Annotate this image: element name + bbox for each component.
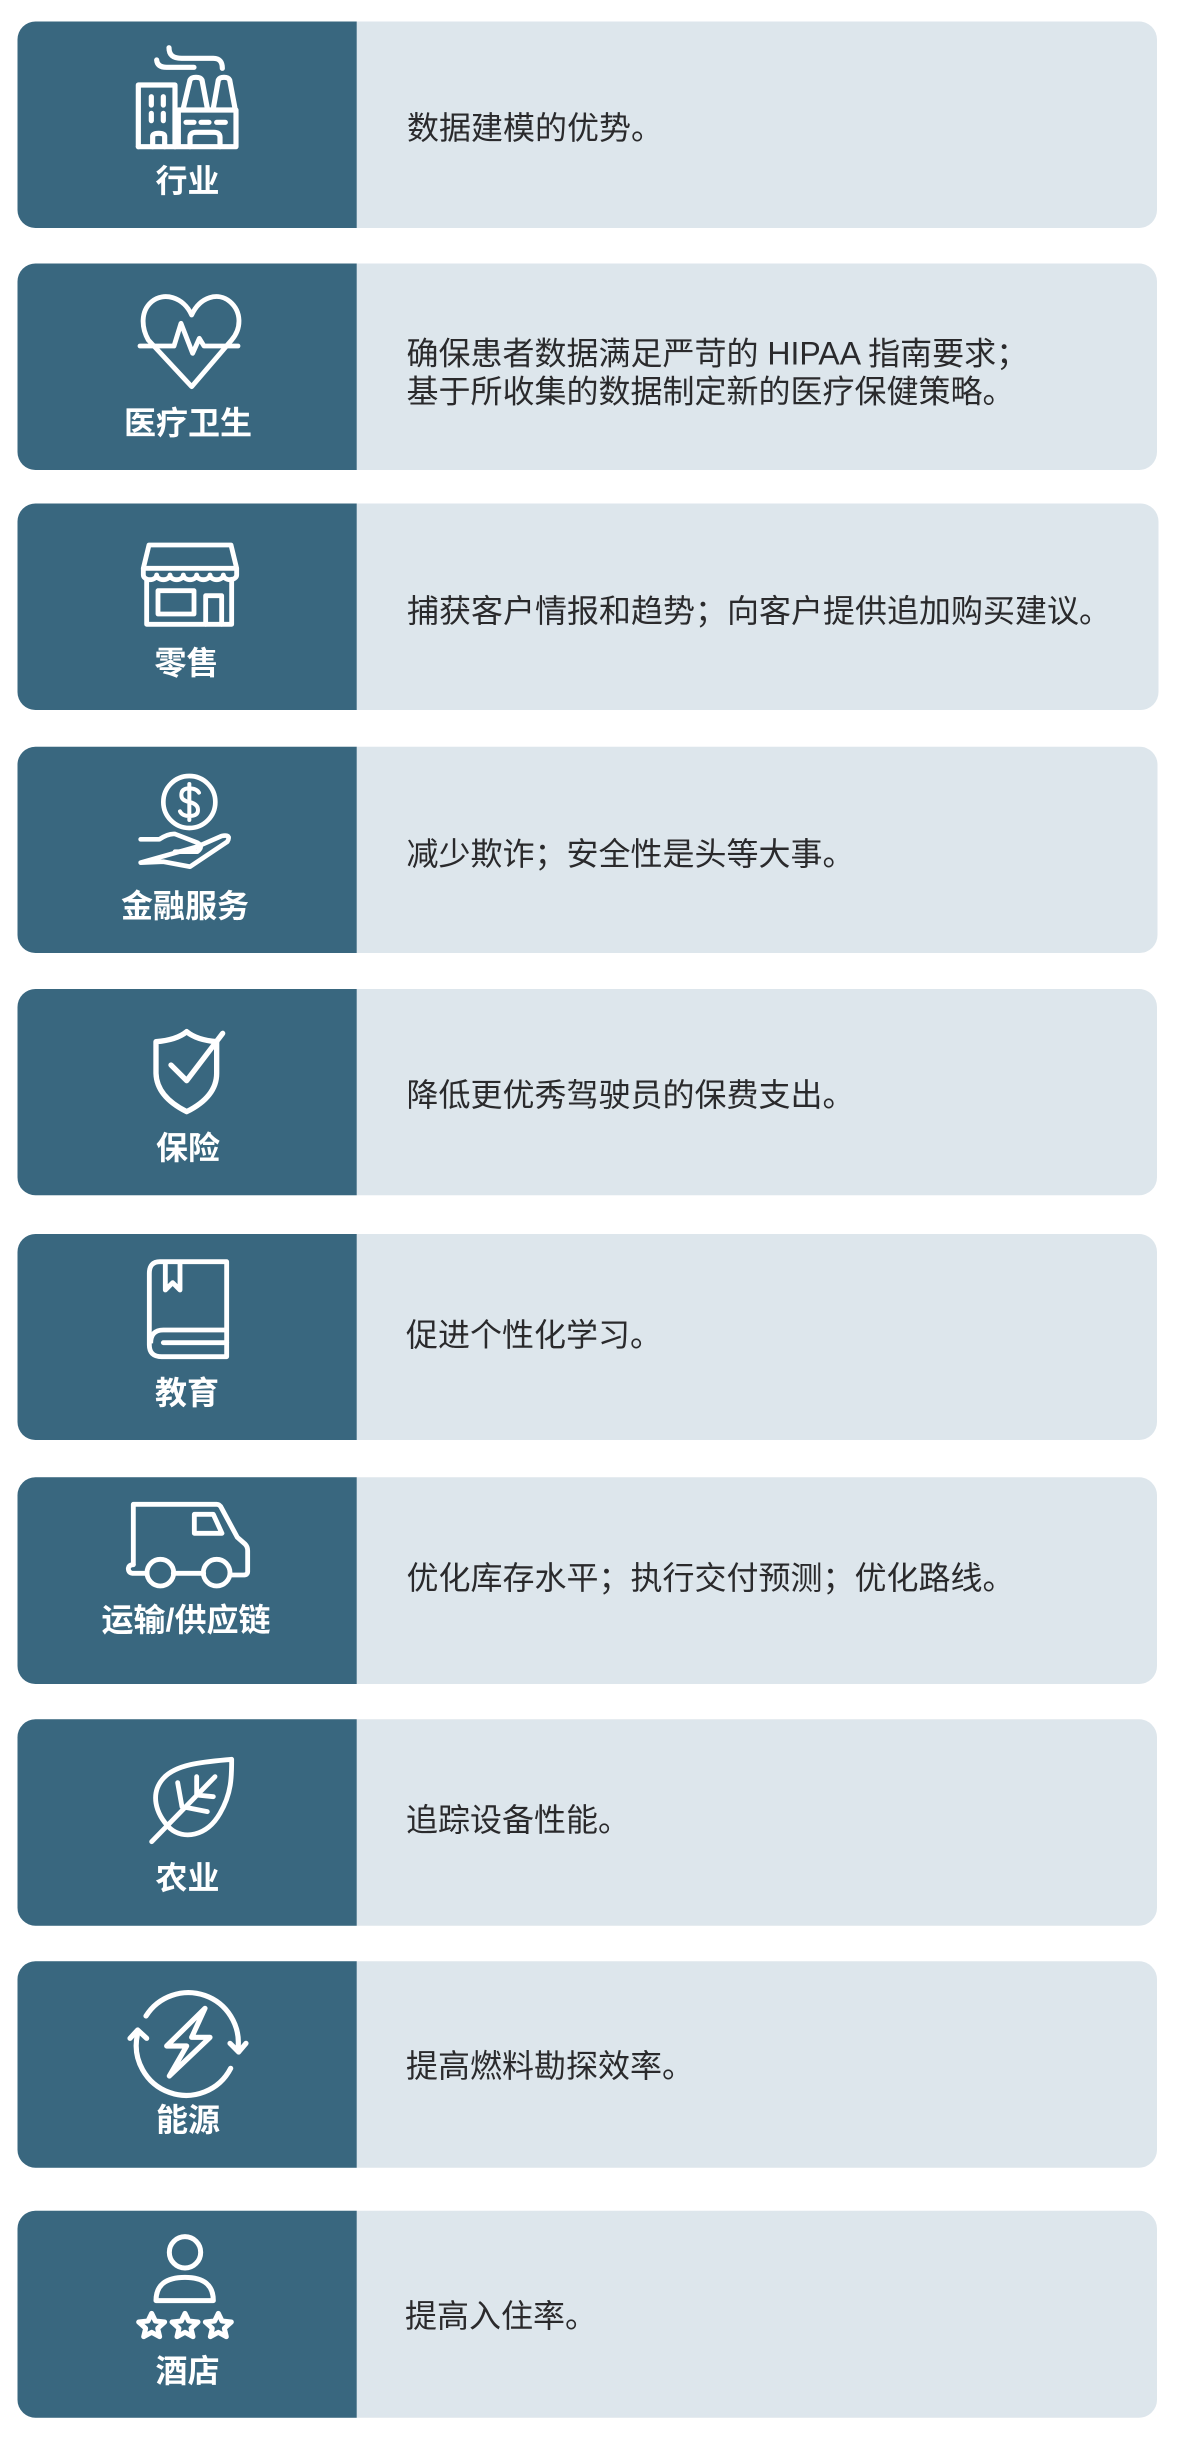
icon: hand holding coin bbox=[141, 776, 229, 867]
description: healthcare bbox=[406, 336, 1028, 410]
content background bbox=[18, 504, 1158, 710]
content background bbox=[18, 1961, 1157, 2168]
panel: transport and supply chain bbox=[18, 1477, 1157, 1684]
content background bbox=[18, 989, 1157, 1195]
label: insurance: 保险 bbox=[156, 1130, 220, 1166]
icon: energy bolt cycle bbox=[130, 1993, 246, 2095]
label background bbox=[18, 1961, 357, 2168]
panel: industry bbox=[18, 22, 1157, 228]
line 1: 确保患者数据满足严苛的 HIPAA 指南要求； bbox=[406, 336, 1028, 372]
panel: energy bbox=[18, 1961, 1157, 2168]
label: agriculture: 农业 bbox=[155, 1860, 220, 1896]
content background bbox=[18, 2211, 1157, 2418]
label background bbox=[18, 747, 357, 953]
icon: person with three stars bbox=[139, 2237, 231, 2337]
label: education: 教育 bbox=[155, 1375, 219, 1411]
label: hotels: 酒店 bbox=[155, 2353, 220, 2389]
description: insurance: 降低更优秀驾驶员的保费支出。 bbox=[406, 1077, 855, 1113]
panel: financial services bbox=[18, 747, 1158, 953]
content background bbox=[18, 1234, 1157, 1440]
icon: book bbox=[149, 1262, 227, 1357]
label background bbox=[18, 1477, 357, 1684]
label background bbox=[18, 1234, 357, 1440]
panel: healthcare bbox=[18, 264, 1157, 470]
label background bbox=[18, 504, 357, 710]
description: hotels: 提高入住率。 bbox=[405, 2298, 597, 2334]
label: financial services: 金融服务 bbox=[121, 888, 249, 924]
description: retail: 捕获客户情报和趋势；向客户提供追加购买建议。 bbox=[407, 593, 1111, 629]
content background bbox=[18, 264, 1157, 470]
icon: storefront bbox=[143, 545, 237, 624]
icon: leaf bbox=[152, 1759, 232, 1842]
content background bbox=[18, 747, 1158, 953]
panel: agriculture bbox=[18, 1719, 1157, 1926]
icon: heart with pulse bbox=[140, 297, 239, 387]
label background bbox=[18, 264, 357, 470]
description: financial services: 减少欺诈；安全性是头等大事。 bbox=[406, 836, 855, 872]
panel: education bbox=[18, 1234, 1157, 1440]
description: energy: 提高燃料勘探效率。 bbox=[406, 2048, 694, 2084]
label: retail: 零售 bbox=[154, 645, 219, 681]
content background bbox=[18, 22, 1157, 228]
label: energy: 能源 bbox=[156, 2102, 220, 2138]
line 2: 基于所收集的数据制定新的医疗保健策略。 bbox=[406, 374, 1015, 410]
description: agriculture: 追踪设备性能。 bbox=[406, 1802, 630, 1838]
content background bbox=[18, 1477, 1157, 1684]
description: industry: 数据建模的优势。 bbox=[407, 110, 663, 146]
description: transport and supply chain: 优化库存水平；执行交付预测；优化路线。 bbox=[406, 1560, 1015, 1596]
panel: hotels bbox=[18, 2211, 1157, 2418]
panel: insurance bbox=[18, 989, 1157, 1195]
content background bbox=[18, 1719, 1157, 1926]
label: healthcare: 医疗卫生 bbox=[124, 405, 252, 441]
description: education: 促进个性化学习。 bbox=[406, 1317, 662, 1353]
icon: shield with check bbox=[156, 1032, 223, 1112]
label background bbox=[18, 22, 357, 228]
label background bbox=[18, 1719, 357, 1926]
label: industry: 行业 bbox=[155, 163, 220, 199]
panel: retail bbox=[18, 504, 1158, 710]
label: transport and supply chain: 运输/供应链 bbox=[102, 1602, 270, 1638]
label background bbox=[18, 2211, 357, 2418]
icon: delivery van bbox=[128, 1504, 248, 1586]
label background bbox=[18, 989, 357, 1195]
icon: factory bbox=[138, 48, 236, 147]
